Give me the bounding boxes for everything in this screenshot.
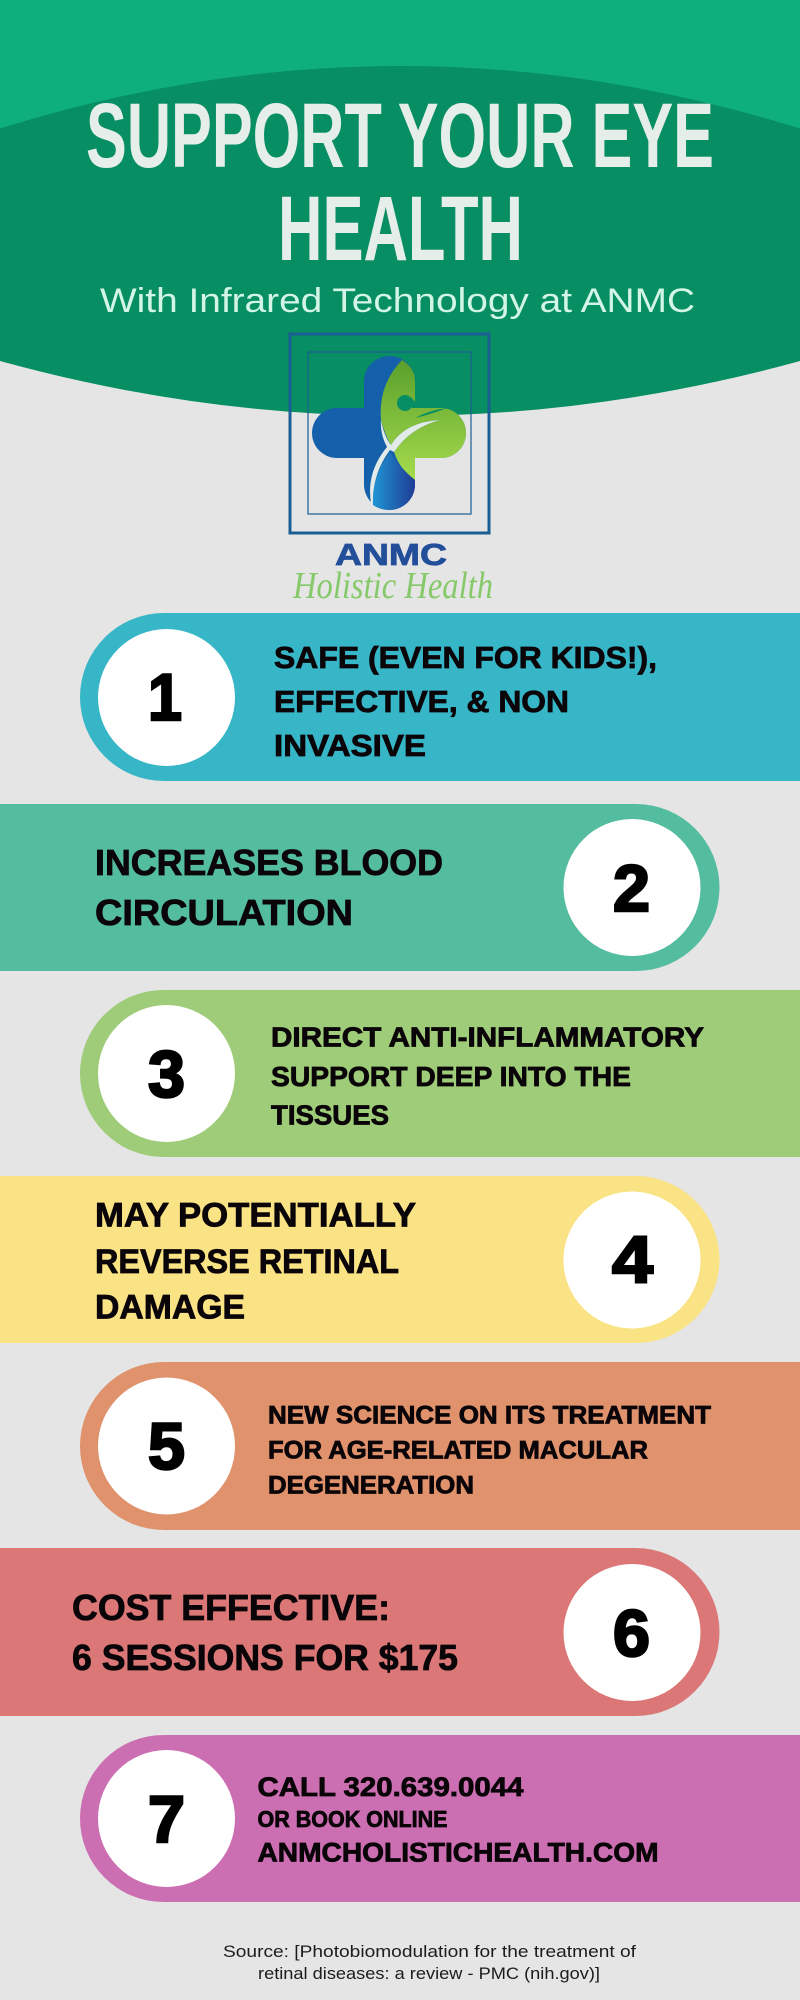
benefit text	[72, 1587, 458, 1678]
benefit text: INVASIVE	[274, 728, 426, 763]
benefit text	[95, 842, 443, 933]
benefit text: INCREASES BLOOD	[95, 842, 443, 883]
benefit text: FOR AGE-RELATED MACULAR	[268, 1436, 648, 1464]
benefit text	[95, 1196, 416, 1326]
benefit text: CIRCULATION	[95, 892, 353, 933]
benefit text: TISSUES	[271, 1100, 389, 1130]
benefit text: DIRECT ANTI-INFLAMMATORY	[271, 1022, 704, 1052]
benefit text	[274, 640, 657, 763]
logo wordmark: ANMC	[335, 537, 447, 572]
logo frame	[290, 334, 489, 533]
benefit text: REVERSE RETINAL	[95, 1243, 399, 1281]
title	[86, 85, 714, 280]
icon: medical cross	[312, 356, 466, 510]
logo tagline: Holistic Health	[292, 565, 493, 607]
source citation	[223, 1942, 636, 1983]
benefit text: SUPPORT DEEP INTO THE	[271, 1061, 631, 1092]
benefit text	[268, 1402, 711, 1500]
source citation: retinal diseases: a review - PMC (nih.gov)]	[258, 1964, 600, 1983]
logo: ANMC Holistic Health	[290, 334, 493, 607]
number 6: 6	[613, 1596, 650, 1670]
benefit text: DEGENERATION	[268, 1472, 474, 1500]
number 5: 5	[148, 1409, 185, 1483]
title: HEALTH	[278, 178, 523, 280]
header banner	[0, 0, 800, 416]
contact text: ANMCHOLISTICHEALTH.COM	[258, 1838, 658, 1868]
panel: benefit 7 call to action	[80, 1735, 800, 1902]
benefit text: NEW SCIENCE ON ITS TREATMENT	[268, 1402, 711, 1430]
panel: benefit 3	[80, 990, 800, 1157]
benefit text: COST EFFECTIVE:	[72, 1587, 390, 1628]
subtitle: With Infrared Technology at ANMC	[100, 282, 695, 320]
contact text: OR BOOK ONLINE	[258, 1806, 448, 1832]
panel: benefit 6	[0, 1548, 720, 1716]
number 4: 4	[612, 1222, 653, 1296]
benefit text: EFFECTIVE, & NON	[274, 684, 569, 719]
number 2: 2	[613, 851, 650, 925]
source citation: Source: [Photobiomodulation for the treatment of	[223, 1942, 636, 1961]
number 1: 1	[148, 660, 182, 734]
panel: benefit 1	[80, 613, 800, 781]
benefit text: DAMAGE	[95, 1288, 245, 1326]
benefit text: MAY POTENTIALLY	[95, 1196, 416, 1234]
benefit text	[271, 1022, 704, 1130]
contact text: CALL 320.639.0044	[258, 1772, 524, 1802]
panel: benefit 2	[0, 804, 720, 971]
number 7: 7	[148, 1782, 185, 1856]
benefit text: 6 SESSIONS FOR $175	[72, 1637, 458, 1678]
number 3: 3	[148, 1037, 185, 1111]
panel: benefit 4	[0, 1176, 720, 1343]
contact text	[258, 1772, 658, 1868]
panel: benefit 5	[80, 1362, 800, 1530]
benefit text: SAFE (EVEN FOR KIDS!),	[274, 640, 657, 675]
